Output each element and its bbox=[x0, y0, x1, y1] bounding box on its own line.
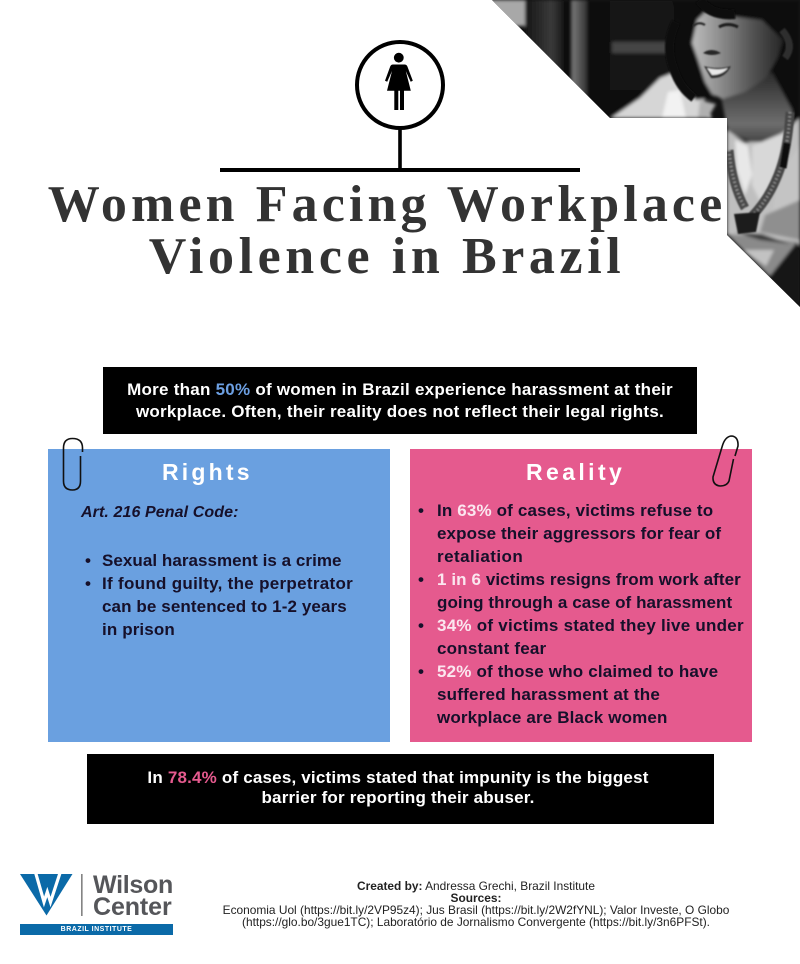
reality list: retaliation bbox=[437, 547, 523, 566]
reality list: In 63% of cases, victims refuse to bbox=[437, 501, 713, 520]
rights list: • bbox=[85, 574, 91, 593]
circle bbox=[357, 42, 443, 128]
panel: reality bbox=[410, 449, 752, 742]
icon: right paperclip bbox=[712, 435, 739, 487]
panel: rights bbox=[48, 449, 390, 742]
article reference: Art. 216 Penal Code: bbox=[81, 504, 239, 521]
credits and sources: (https://glo.bo/3gue1TC); Laboratório de Jornalismo Convergente (https://bit.ly/3n6PFSt). bbox=[242, 915, 710, 929]
credits and sources: Economia Uol (https://bit.ly/2VP95z4); Jus Brasil (https://bit.ly/2W2fYNL); Valor Investe, O Globo bbox=[223, 903, 729, 917]
title: Women Facing Workplace bbox=[48, 176, 726, 233]
institute band: BRAZIL INSTITUTE bbox=[61, 926, 132, 932]
stem bbox=[398, 129, 402, 169]
callout: impunity: In 78.4% of cases, victims stated that impunity is the biggest bbox=[147, 768, 649, 787]
reality list: 52% of those who claimed to have bbox=[437, 662, 718, 681]
reality list: going through a case of harassment bbox=[437, 593, 732, 612]
credits and sources: Created by: Andressa Grechi, Brazil Institute bbox=[357, 879, 595, 893]
reality list: • bbox=[418, 570, 424, 589]
title: Violence in Brazil bbox=[149, 228, 625, 285]
logo: Wilson Center Brazil Institute bbox=[20, 871, 173, 935]
callout: 50 percent: More than 50% of women in Brazil experience harassment at their bbox=[127, 380, 673, 399]
reality list: 1 in 6 victims resigns from work after bbox=[437, 570, 741, 589]
wordmark: Wilson bbox=[93, 871, 173, 899]
logo: Wilson Center Brazil Institute: Center bbox=[93, 893, 172, 921]
rights list: Sexual harassment is a crime bbox=[102, 551, 342, 570]
photo: smiling woman in black and white bbox=[492, 0, 800, 307]
reality list: • bbox=[418, 616, 424, 635]
callout: 50 percent: workplace. Often, their reality does not reflect their legal rights. bbox=[136, 402, 664, 421]
callout: impunity bbox=[87, 754, 714, 824]
callout: 50 percent bbox=[103, 367, 697, 434]
title bbox=[48, 176, 726, 285]
heading: reality: Reality bbox=[526, 459, 625, 485]
reality list: suffered harassment at the bbox=[437, 685, 660, 704]
icon: left paperclip bbox=[62, 438, 84, 491]
credits and sources bbox=[223, 879, 729, 929]
horizontal rule bbox=[220, 168, 580, 172]
rights list: can be sentenced to 1-2 years bbox=[102, 597, 347, 616]
reality list: expose their aggressors for fear of bbox=[437, 524, 721, 543]
reality list: • bbox=[418, 501, 424, 520]
rights list: • bbox=[85, 551, 91, 570]
rights list: in prison bbox=[102, 620, 175, 639]
reality list: workplace are Black women bbox=[437, 708, 668, 727]
institute band bbox=[20, 924, 173, 935]
reality list: • bbox=[418, 662, 424, 681]
heading: rights: Rights bbox=[162, 459, 253, 485]
icon: woman in circle on a stem bbox=[220, 40, 580, 172]
logo mark bbox=[20, 874, 82, 916]
reality list: 34% of victims stated they live under bbox=[437, 616, 744, 635]
callout: impunity: barrier for reporting their abuser. bbox=[261, 788, 535, 807]
reality list: constant fear bbox=[437, 639, 546, 658]
rights list: If found guilty, the perpetrator bbox=[102, 574, 353, 593]
woman figure bbox=[385, 53, 413, 110]
reality list bbox=[418, 501, 744, 727]
credits and sources: Sources: bbox=[451, 891, 501, 905]
rights list bbox=[85, 551, 353, 639]
